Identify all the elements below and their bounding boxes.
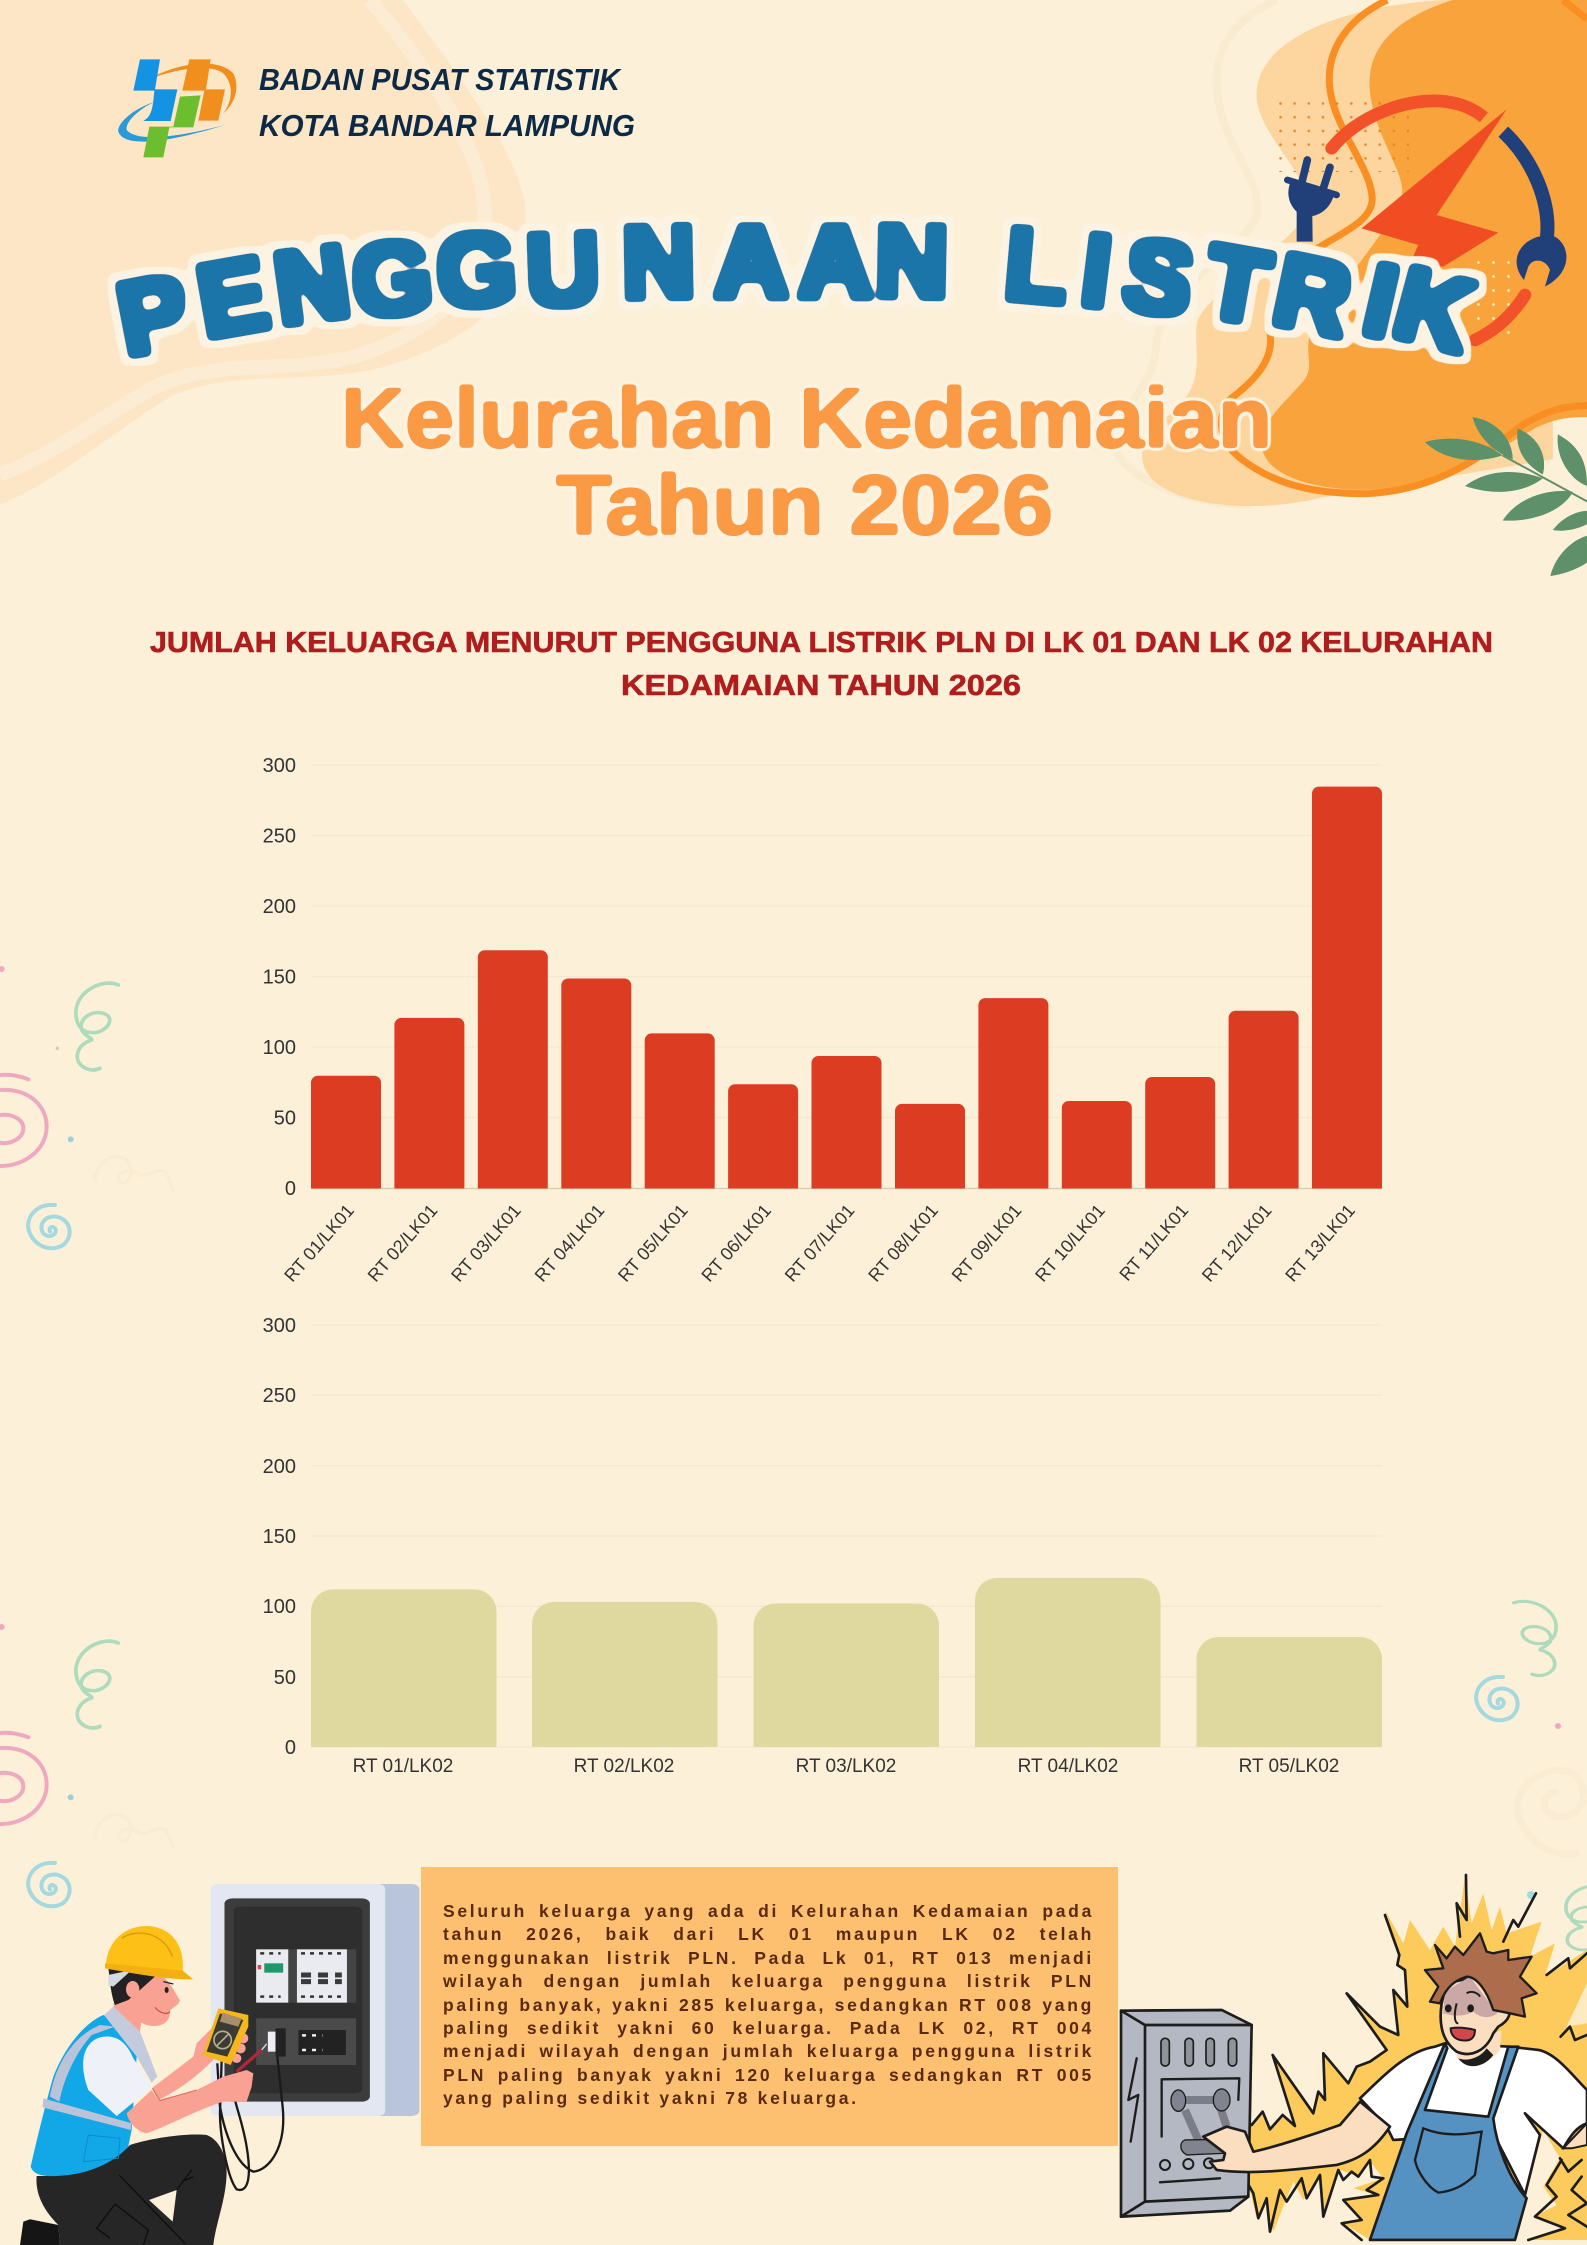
text box: summary: wilayah dengan jumlah keluarga pengguna listrik PLN — [443, 1971, 1094, 1991]
x axis labels LK 01 — [280, 1201, 1359, 1286]
x axis labels LK 01: RT 08/LK01 — [864, 1201, 942, 1286]
x axis labels LK 01: RT 10/LK01 — [1031, 1201, 1109, 1286]
text box: summary: menjadi wilayah dengan jumlah keluarga pengguna listrik — [443, 2041, 1094, 2061]
subtitle: Kelurahan Kedamaian — [341, 371, 1272, 465]
text box: summary: menggunakan listrik PLN. Pada Lk 01, RT 013 menjadi — [443, 1948, 1094, 1968]
x axis labels LK 01: RT 02/LK01 — [364, 1201, 441, 1286]
x axis labels LK 01: RT 09/LK01 — [948, 1201, 1025, 1286]
y axis labels LK 01 — [263, 755, 296, 1200]
x axis labels LK 02: RT 01/LK02 — [353, 1756, 453, 1777]
x axis labels LK 01: RT 07/LK01 — [781, 1201, 859, 1286]
logo text: BADAN PUSAT STATISTIK — [259, 62, 622, 97]
x axis labels LK 02: RT 05/LK02 — [1239, 1756, 1339, 1777]
bar chart: LK 01 — [263, 755, 1382, 1286]
y axis labels LK 02: 50 — [274, 1667, 296, 1689]
y axis labels LK 01: 100 — [263, 1037, 296, 1059]
text box: summary: PLN paling banyak yakni 120 keluarga sedangkan RT 005 — [443, 2065, 1094, 2085]
text box: summary: tahun 2026, baik dari LK 01 maupun LK 02 telah — [443, 1924, 1094, 1944]
y axis labels LK 02: 250 — [263, 1385, 296, 1407]
chart heading: KEDAMAIAN TAHUN 2026 — [621, 670, 1021, 702]
bars LK 02 — [311, 1578, 1382, 1747]
y axis labels LK 01: 150 — [263, 966, 296, 988]
illustration: electrical cabinet — [211, 1884, 419, 2116]
logo text — [259, 62, 635, 143]
title: PENGGUNAAN LISTRIK — [108, 203, 1485, 378]
y axis labels LK 02: 200 — [263, 1456, 296, 1478]
x axis labels LK 01: RT 01/LK01 — [280, 1201, 358, 1286]
x axis labels LK 01: RT 06/LK01 — [697, 1201, 775, 1286]
subtitle: Tahun 2026 — [556, 458, 1053, 552]
bar chart: LK 02 — [263, 1315, 1382, 1794]
x axis labels LK 02: RT 02/LK02 — [574, 1756, 674, 1777]
subtitle — [341, 371, 1272, 552]
bars LK 01 — [311, 787, 1382, 1211]
illustration: shocked man — [1203, 1933, 1587, 2240]
y axis labels LK 01: 250 — [263, 826, 296, 848]
icon: BPS logo — [118, 59, 236, 157]
y axis labels LK 01: 50 — [274, 1108, 296, 1130]
y axis labels LK 02: 150 — [263, 1526, 296, 1548]
icon: gauge with lightning bolt, plug and wrench — [1287, 101, 1566, 340]
y axis labels LK 02: 100 — [263, 1596, 296, 1618]
x axis labels LK 01: RT 13/LK01 — [1281, 1201, 1359, 1286]
y axis labels LK 01: 0 — [285, 1178, 296, 1200]
text box: summary — [421, 1867, 1118, 2146]
x axis labels LK 01: RT 11/LK01 — [1115, 1201, 1192, 1285]
background blobs: top right — [1115, 0, 1587, 506]
x axis labels LK 01: RT 05/LK01 — [614, 1201, 692, 1286]
icon: green leaves — [1425, 417, 1587, 576]
x axis labels LK 02 — [353, 1756, 1339, 1777]
text box: summary: Seluruh keluarga yang ada di Kelurahan Kedamaian pada — [443, 1901, 1094, 1921]
x axis labels LK 02: RT 04/LK02 — [1018, 1756, 1118, 1777]
y axis labels LK 02: 0 — [285, 1737, 296, 1759]
x axis labels LK 01: RT 04/LK01 — [531, 1201, 608, 1286]
text box: summary: paling banyak, yakni 285 keluarga, sedangkan RT 008 yang — [443, 1995, 1094, 2015]
chart heading — [150, 627, 1493, 702]
illustration: electric shock burst — [1210, 1875, 1587, 2240]
y axis labels LK 01: 300 — [263, 755, 296, 777]
text box: summary: yang paling sedikit yakni 78 keluarga. — [443, 2088, 859, 2108]
text box: summary: paling sedikit yakni 60 keluarga. Pada LK 02, RT 004 — [443, 2018, 1094, 2038]
y axis labels LK 01: 200 — [263, 896, 296, 918]
x axis labels LK 01: RT 12/LK01 — [1198, 1201, 1276, 1286]
illustration: switch box — [1121, 2010, 1252, 2217]
decorative swirls: left lower — [0, 1624, 173, 1906]
chart heading: JUMLAH KELUARGA MENURUT PENGGUNA LISTRIK PLN DI LK 01 DAN LK 02 KELURAHAN — [150, 627, 1493, 659]
y axis labels LK 02: 300 — [263, 1315, 296, 1337]
x axis labels LK 02: RT 03/LK02 — [796, 1756, 896, 1777]
logo text: KOTA BANDAR LAMPUNG — [259, 108, 635, 143]
decorative swirls: right — [1476, 1601, 1587, 1950]
background blob: top left — [0, 0, 526, 505]
illustration: technician with multimeter — [20, 1926, 283, 2245]
dot patterns — [1279, 102, 1517, 335]
decorative swirls: left upper — [0, 966, 173, 1248]
y axis labels LK 02 — [263, 1315, 296, 1759]
x axis labels LK 01: RT 03/LK01 — [447, 1201, 525, 1286]
